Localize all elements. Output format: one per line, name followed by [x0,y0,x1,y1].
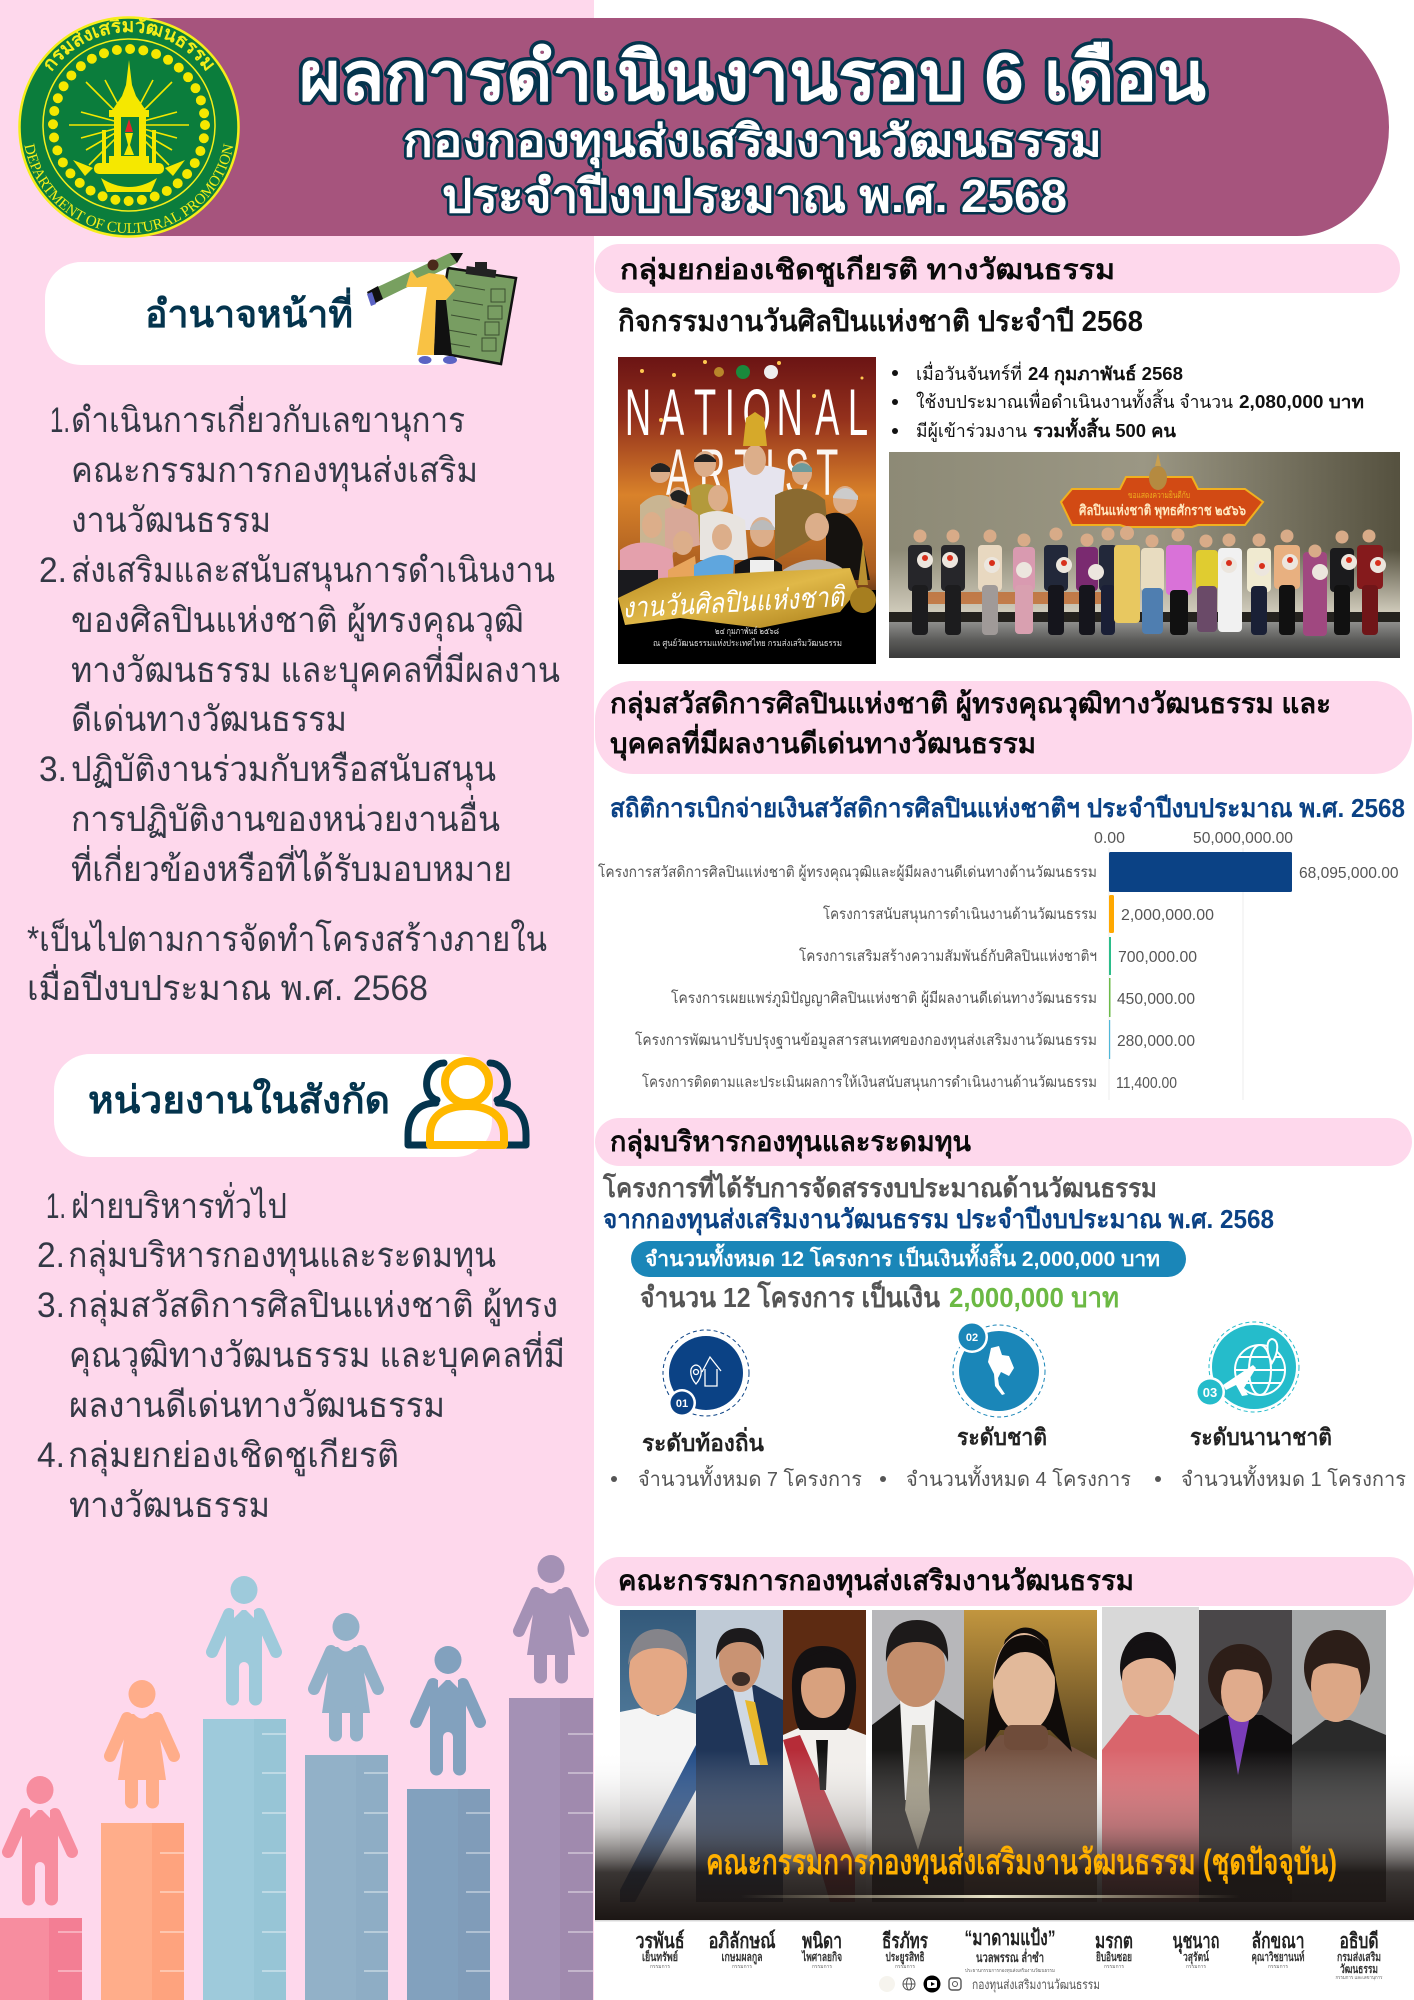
figure 5 [416,1646,480,1776]
panel: fund management heading [595,1118,1412,1166]
text block: event bullets: 2,080,000 บาท [1239,392,1364,412]
bar chart: welfare disbursement: โครงการสวัสดิการศิลปินแห่งชาติ ผู้ทรงคุณวุฒิและผู้มีผลงานดีเด่นทางด้านวัฒนธรรม [598,863,1097,882]
text block: duties list: คณะกรรมการกองทุนส่งเสริม [71,451,478,491]
text block: units list: ผลงานดีเด่นทางวัฒนธรรม [69,1386,445,1425]
text block: duties list: 2. [39,551,67,590]
bar chart: welfare disbursement: โครงการเผยแพร่ภูมิปัญญาศิลปินแห่งชาติ ผู้มีผลงานดีเด่นทางวัฒนธรรม [671,989,1097,1007]
figure 6 [519,1555,583,1677]
committee names: ไพศาลยกิจ [801,1949,842,1964]
text block: project allocation heading: จากกองทุนส่งเสริมงานวัฒนธรรม ประจำปีงบประมาณ พ.ศ. 2568 [603,1204,1274,1236]
text block: duties list: ปฏิบัติงานร่วมกับหรือสนับสนุน [71,750,496,790]
text block: duties list: ส่งเสริมและสนับสนุนการดำเนินงาน [71,551,555,591]
callout: total projects pill [631,1241,1186,1277]
photo: award ceremony [889,452,1400,658]
committee names: “มาดามแป้ง” [964,1926,1056,1950]
callout: amount line [640,1280,1119,1313]
bar chart: welfare disbursement: โครงการพัฒนาปรับปรุงฐานข้อมูลสารสนเทศของกองทุนส่งเสริมงานวัฒนธรรม [635,1031,1097,1050]
text block: units list: ฝ่ายบริหารทั่วไป [71,1182,287,1226]
level project counts [611,1465,1406,1491]
icon: national level [953,1321,1045,1417]
bar chart: welfare disbursement: โครงการติดตามและประเมินผลการให้เงินสนับสนุนการดำเนินงานด้านวัฒนธรรม [642,1073,1097,1092]
figure 1 [8,1776,72,1906]
main title: ผลการดำเนินงานรอบ 6 เดือน [299,39,1206,115]
social media row [879,1976,1100,1993]
panel: committee heading [595,1557,1414,1606]
committee names: กรรมการ และเลขานุการ [1336,1975,1383,1981]
text block: duties list: ของศิลปินแห่งชาติ ผู้ทรงคุณวุฒิ [71,601,524,641]
poster: national artist: NATIONAL [625,377,868,450]
panel: honouring group heading: กลุ่มยกย่องเชิดชูเกียรติ ทางวัฒนธรรม [620,254,1115,287]
committee names: ยิบอินซอย [1096,1950,1132,1964]
committee names: ธีรภัทร [882,1929,929,1953]
bar chart: welfare disbursement: 0.00 [1094,830,1125,847]
bar chart: welfare disbursement: โครงการเสริมสร้างความสัมพันธ์กับศิลปินแห่งชาติฯ [799,947,1097,965]
title banner [130,18,1389,236]
photo: award ceremony: ขอแสดงความยินดีกับ [1128,490,1190,500]
text block: duties list: 3. [39,750,67,789]
text block: duties list: ดำเนินการเกี่ยวกับเลขานุการ [71,396,465,441]
text block: duties list: ดีเด่นทางวัฒนธรรม [71,700,347,739]
poster: national artist: ARTIST [666,437,838,510]
committee names: วัฒนธรรม [1340,1962,1378,1976]
illustration: people on rising bars [0,1555,593,2000]
committee names: กรรมการ [1186,1964,1206,1970]
panel: committee heading: คณะกรรมการกองทุนส่งเสริมงานวัฒนธรรม [618,1565,1134,1598]
committee names: กรมส่งเสริม [1337,1950,1381,1964]
text block: duties list: 1. [50,401,70,440]
text block: duties list: การปฏิบัติงานของหน่วยงานอื่น [71,795,500,839]
note text: *เป็นไปตามการจัดทำโครงสร้างภายใน [27,918,547,959]
portrait 4 [872,1610,964,1902]
text block: units list: 4. [37,1436,65,1475]
text block: units list [37,1182,565,1525]
poster: national artist: ๒๔ กุมภาพันธ์ ๒๕๖๘ [715,625,779,637]
icon: international level [1195,1322,1299,1412]
poster: national artist: ณ ศูนย์วัฒนธรรมแห่งประเทศไทย กรมส่งเสริมวัฒนธรรม [653,637,842,649]
text block: event bullets [892,361,1364,442]
bar chart: welfare disbursement: โครงการสนับสนุนการดำเนินงานด้านวัฒนธรรม [823,905,1097,924]
text block: units list: กลุ่มสวัสดิการศิลปินแห่งชาติ ผู้ทรง [68,1286,558,1326]
panel: units heading pill [54,1054,492,1157]
portrait 6 [1102,1607,1199,1902]
committee names: ประธานกรรมการกองทุนส่งเสริมงานวัฒนธรรม [965,1967,1055,1974]
committee names: วรพันธ์ [636,1929,684,1953]
committee names: กรรมการ [650,1964,670,1970]
heading: duties: อำนาจหน้าที่ [145,287,353,336]
text block: units list: 2. [37,1236,65,1275]
committee names: กรรมการ [812,1964,832,1970]
text block: units list: กลุ่มยกย่องเชิดชูเกียรติ [68,1436,399,1476]
text block: units list: 1. [46,1187,66,1226]
text block: duties list: ที่เกี่ยวข้องหรือที่ได้รับมอบหมาย [71,845,512,889]
bar chart: welfare disbursement: 280,000.00 [1117,1033,1195,1050]
text block: units list: 3. [37,1286,65,1325]
icon: local level: 01 [676,1398,688,1410]
text block: event bullets: รวมทั้งสิ้น 500 คน [1033,417,1177,441]
committee names: คุณาวิชยานนท์ [1252,1950,1305,1965]
note text: เมื่อปีงบประมาณ พ.ศ. 2568 [27,964,428,1008]
poster: national artist [618,357,876,664]
level labels: ระดับชาติ [957,1424,1047,1450]
committee names: เกษมผลกูล [722,1950,762,1965]
committee names: ลักขณา [1252,1930,1304,1953]
icon: national level: 02 [966,1332,978,1344]
level labels: ระดับท้องถิ่น [642,1426,764,1456]
committee names: กรรมการ [1104,1964,1124,1970]
portrait 3 [783,1610,866,1902]
committee names: มรกต [1095,1930,1133,1953]
panel: honouring group heading [595,244,1400,293]
committee names: กรรมการ [895,1964,915,1970]
text block: units list: กลุ่มบริหารกองทุนและระดมทุน [68,1236,496,1276]
level project counts: จำนวนทั้งหมด 7 โครงการ [638,1465,862,1491]
committee names: อภิลักษณ์ [708,1929,776,1953]
text block: event bullets: 24 กุมภาพันธ์ 2568 [1028,363,1183,386]
left column background [0,0,594,2000]
text block: duties list [39,396,560,889]
panel: welfare group heading [595,681,1412,774]
portrait 1 [620,1610,696,1902]
level project counts: จำนวนทั้งหมด 4 โครงการ [906,1465,1131,1491]
photo: award ceremony: ศิลปินแห่งชาติ พุทธศักราช ๒๕๖๖ [1079,502,1246,519]
subtitle line 1: กองกองทุนส่งเสริมงานวัฒนธรรม [403,117,1102,169]
text block: units list: คุณวุฒิทางวัฒนธรรม และบุคคลที่มี [69,1331,565,1376]
committee names: ประยูรสิทธิ [886,1950,924,1965]
committee names: กรรมการ [1268,1964,1288,1970]
committee names: กรรมการ [732,1964,752,1970]
icon: international level: 03 [1203,1385,1217,1400]
text block: duties list: ทางวัฒนธรรม และบุคคลที่มีผลงาน [71,646,560,691]
text block: event bullets: ใช้งบประมาณเพื่อดำเนินงานทั้งสิ้น จำนวน [916,389,1233,412]
committee names: เย็นทรัพย์ [642,1949,678,1964]
text block: event bullets: มีผู้เข้าร่วมงาน [916,421,1027,442]
panel: duties heading pill [45,262,475,365]
panel: fund management heading: กลุ่มบริหารกองทุนและระดมทุน [610,1126,971,1159]
bar chart: welfare disbursement: 50,000,000.00 [1193,830,1293,847]
level labels: ระดับนานาชาติ [1190,1424,1332,1450]
photo strip: committee portraits [595,1607,1414,1922]
panel: welfare group heading: กลุ่มสวัสดิการศิลปินแห่งชาติ ผู้ทรงคุณวุฒิทางวัฒนธรรม และ [610,688,1331,721]
text block: event bullets: เมื่อวันจันทร์ที่ [916,361,1022,384]
committee names: นวลพรรณ ล่ำซำ [976,1948,1044,1965]
bar chart: welfare disbursement: 11,400.00 [1116,1075,1177,1092]
dark fade band [595,1750,1414,1920]
committee names: พนิดา [802,1930,842,1953]
figure 3 [212,1576,276,1706]
text block: project allocation heading [602,1169,1274,1236]
icon: local level [663,1330,749,1417]
icon: person with pencil and clipboard [367,253,516,364]
portrait 8 [1292,1610,1386,1902]
subheading: national artist day: กิจกรรมงานวันศิลปินแห่งชาติ ประจำปี 2568 [618,306,1143,338]
callout: amount line: 2,000,000 บาท [949,1282,1119,1313]
committee names: วสุรัตน์ [1183,1950,1210,1965]
callout: total projects pill: จำนวนทั้งหมด 12 โครงการ เป็นเงินทั้งสิ้น 2,000,000 บาท [645,1243,1160,1271]
bar chart: welfare disbursement: 700,000.00 [1118,949,1197,966]
callout: amount line: จำนวน 12 โครงการ เป็นเงิน [640,1280,940,1313]
bar chart: welfare disbursement: 68,095,000.00 [1299,865,1399,882]
portrait 5 [964,1610,1097,1902]
level labels [642,1424,1332,1456]
portrait 2 [696,1610,783,1902]
committee names [636,1926,1383,1981]
committee names: อธิบดี [1340,1929,1378,1953]
social media row: กองทุนส่งเสริมงานวัฒนธรรม [972,1977,1100,1993]
bar chart: welfare disbursement: 450,000.00 [1117,991,1195,1008]
logo: department seal [18,16,240,238]
heading: units: หน่วยงานในสังกัด [88,1078,390,1122]
poster: national artist: งานวันศิลปินแห่งชาติ [621,581,847,624]
panel: welfare group heading: บุคคลที่มีผลงานดีเด่นทางวัฒนธรรม [610,723,1036,761]
logo: department seal: กรมส่งเสริมวัฒนธรรม [45,17,214,72]
text block: duties list: งานวัฒนธรรม [71,501,271,540]
note text [27,918,547,1008]
figure 2 [110,1680,174,1802]
text block: units list: ทางวัฒนธรรม [69,1486,270,1525]
bar chart: welfare disbursement: 2,000,000.00 [1121,907,1214,924]
bar chart: welfare disbursement [598,830,1399,1100]
level project counts: จำนวนทั้งหมด 1 โครงการ [1181,1465,1406,1491]
icon: people group [408,1061,526,1145]
logo: department seal: DEPARTMENT OF CULTURAL PROMOTION [24,143,234,233]
portrait 7 [1199,1610,1292,1902]
committee names: นุชนาถ [1172,1930,1220,1955]
subtitle line 2: ประจำปีงบประมาณ พ.ศ. 2568 [442,170,1067,222]
text block: project allocation heading: โครงการที่ได้รับการจัดสรรงบประมาณด้านวัฒนธรรม [602,1169,1157,1203]
figure 4 [314,1613,378,1735]
